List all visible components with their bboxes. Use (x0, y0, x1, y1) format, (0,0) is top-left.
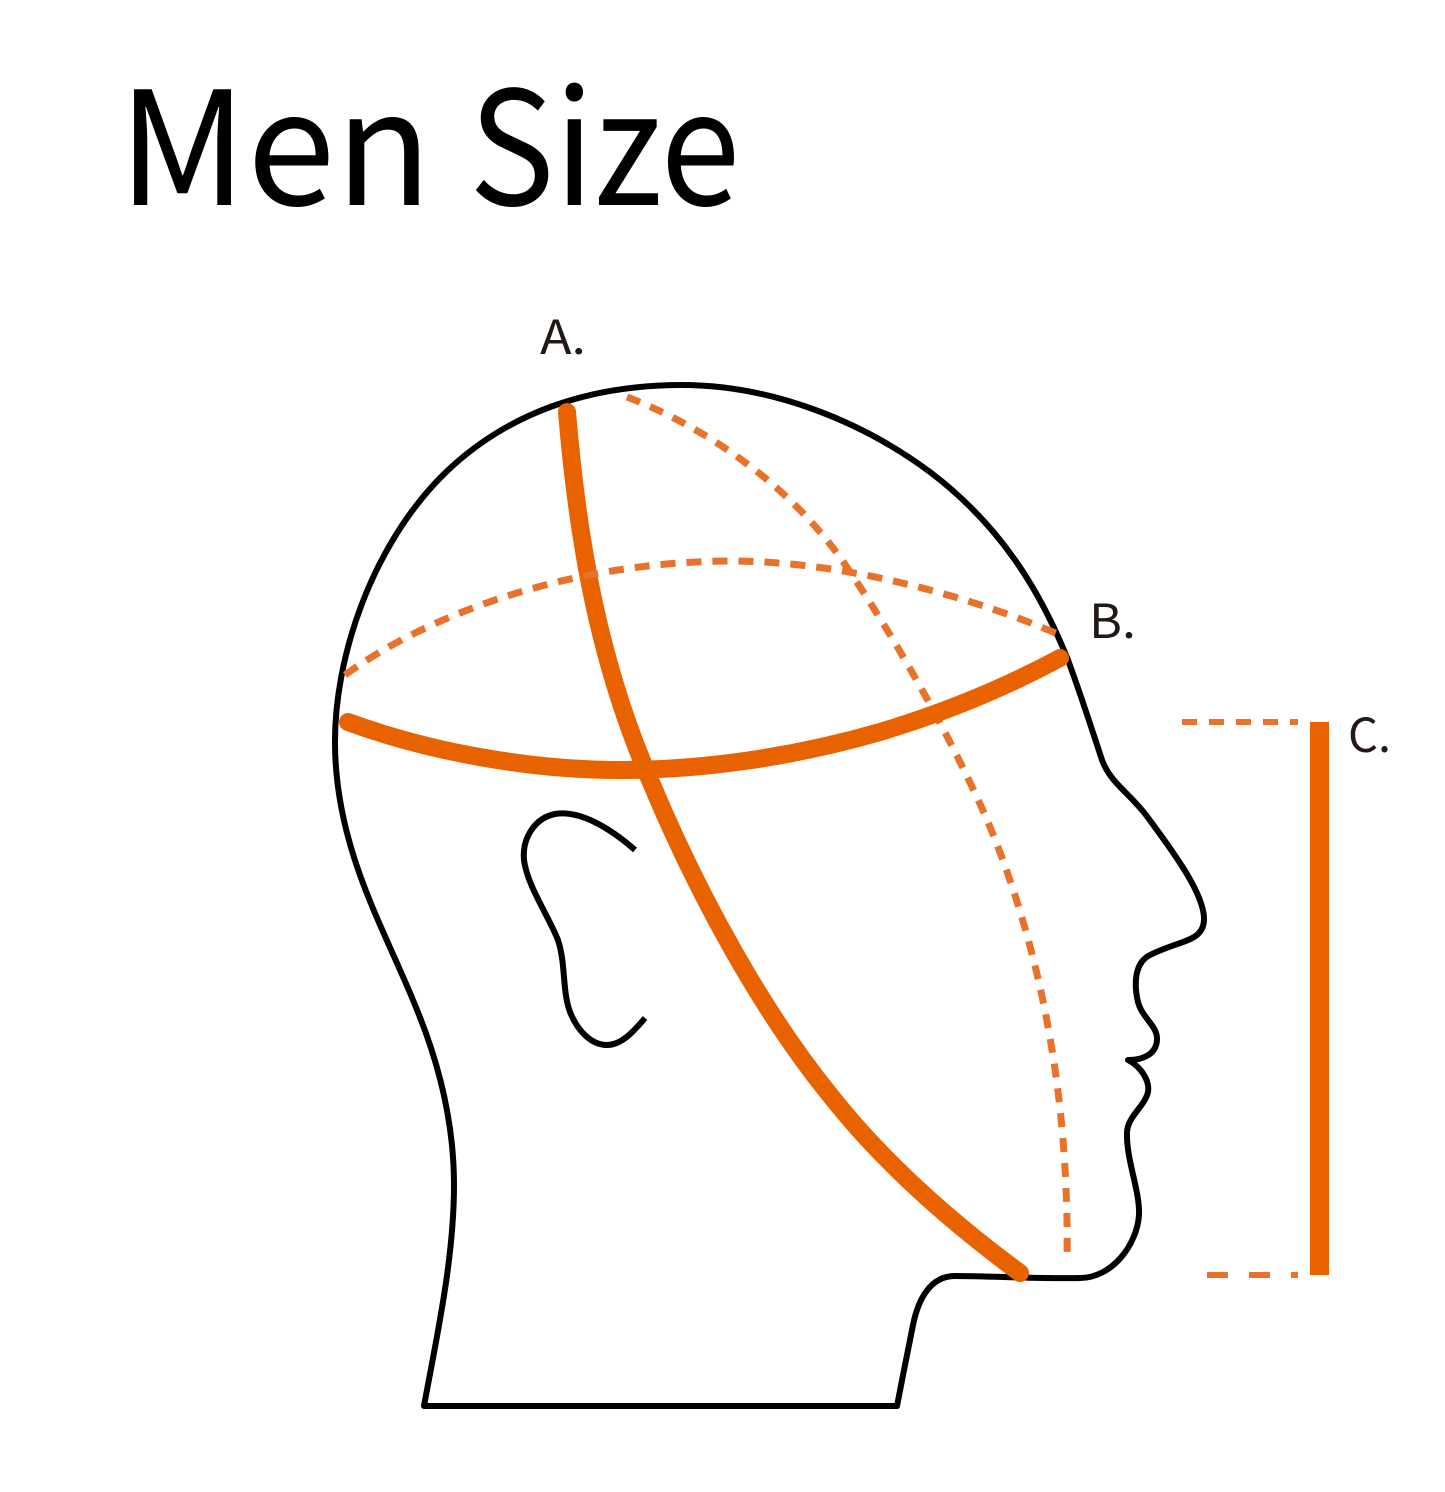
ear (524, 813, 645, 1045)
measurement C: bar (1310, 722, 1329, 1275)
label A: A. (540, 299, 586, 368)
label C: C. (1348, 697, 1391, 766)
measurement C: top dashed guide (1182, 719, 1298, 725)
measurement B: dashed line (345, 561, 1060, 675)
head outline (335, 385, 1204, 1406)
label B: B. (1089, 583, 1136, 652)
measurement A: solid line (567, 412, 1020, 1273)
measurement C: bottom dashed guide (1207, 1272, 1298, 1278)
measurement B: solid line (348, 658, 1060, 770)
title: Size (469, 22, 740, 251)
title (118, 22, 740, 251)
measurement A: dashed line (627, 397, 1067, 1262)
title: Men (118, 22, 432, 251)
